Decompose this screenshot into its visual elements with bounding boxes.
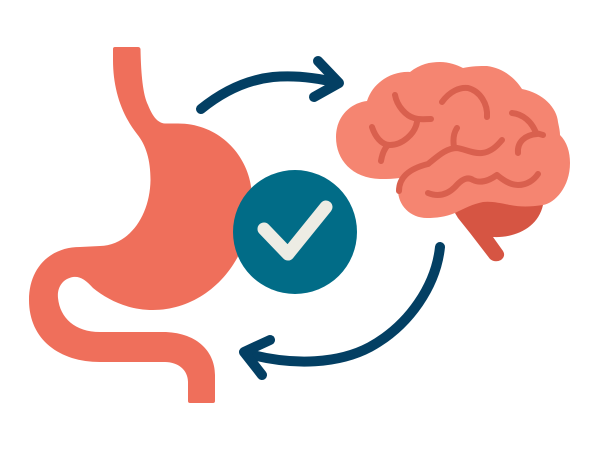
check mark bbox=[264, 207, 326, 254]
icon: check badge bbox=[233, 170, 357, 294]
arrow: stomach to brain bbox=[201, 61, 339, 109]
brain: fold lines bbox=[372, 88, 543, 195]
brain: cerebrum bbox=[336, 62, 570, 218]
brain: cerebellum and stem bbox=[452, 190, 544, 261]
icon: brain bbox=[336, 62, 570, 261]
arrow: brain to stomach bbox=[244, 247, 440, 375]
icon: stomach bbox=[29, 47, 252, 403]
badge circle bbox=[233, 170, 357, 294]
